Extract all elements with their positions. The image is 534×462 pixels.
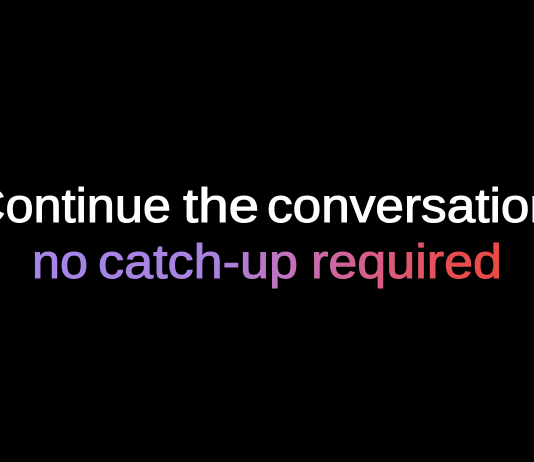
headline line 1: the: [183, 180, 259, 233]
headline line 1: conversation: [267, 180, 534, 233]
headline line 2 gradient: catch-up: [98, 236, 298, 289]
headline line 2 gradient: no: [32, 236, 88, 289]
headline line 1: [0, 180, 534, 233]
headline line 2 gradient: [32, 236, 502, 289]
headline line 2 gradient: required: [311, 236, 502, 289]
